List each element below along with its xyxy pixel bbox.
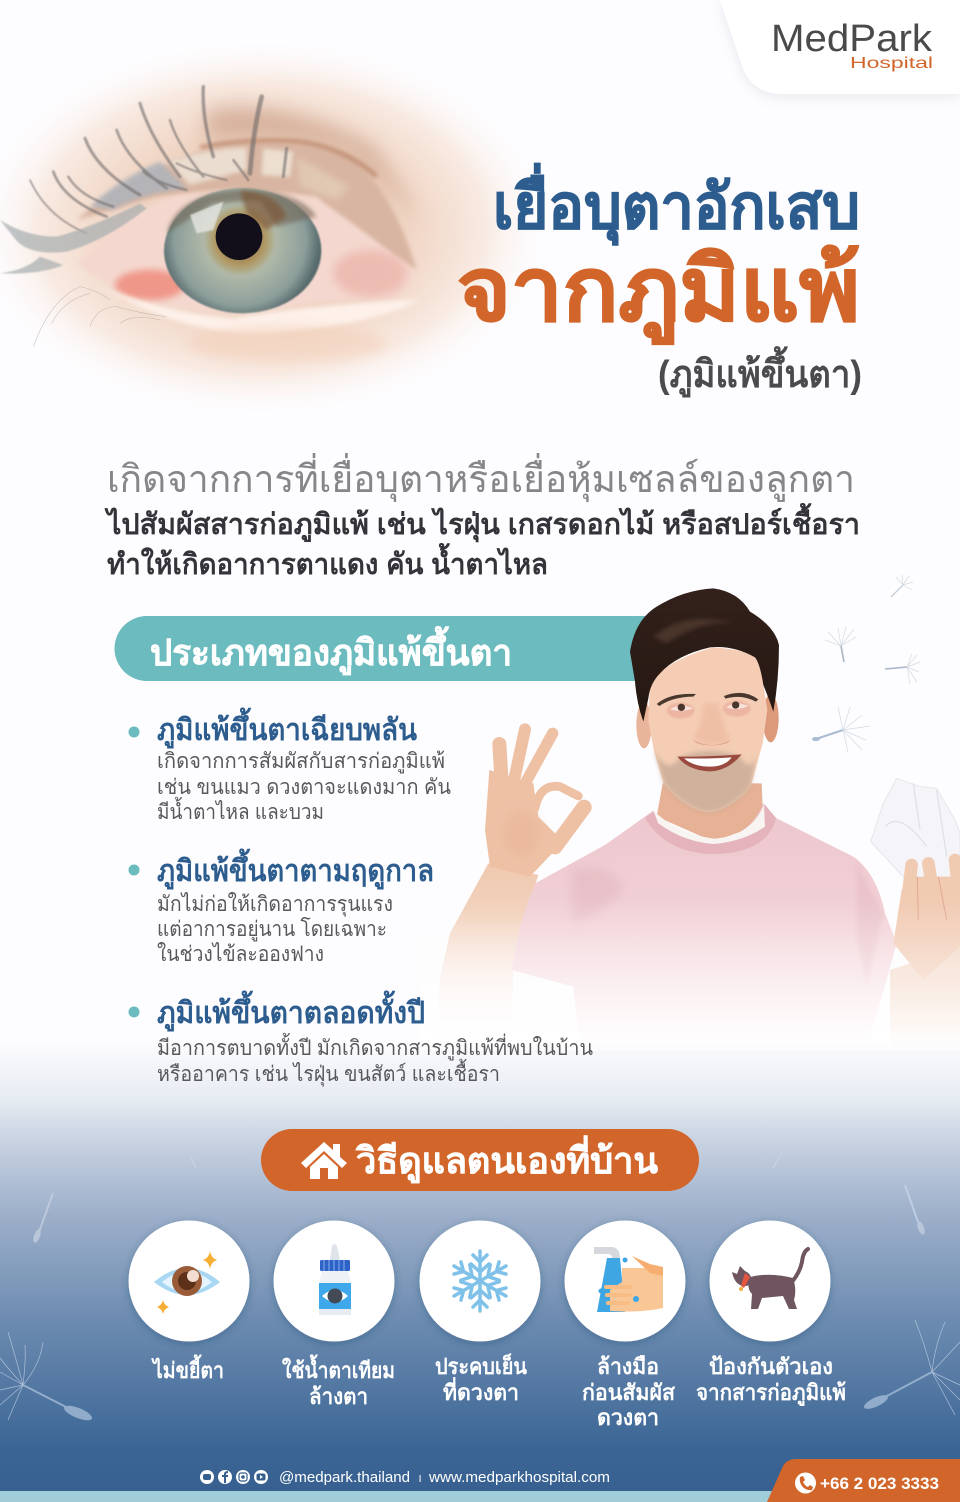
label: จากสารก่อภูมิแพ้ xyxy=(696,1380,846,1407)
neck xyxy=(657,783,763,842)
body: มีอาการตบาดทั้งปี มักเกิดจากสารภูมิแพ้ที่พบในบ้าน xyxy=(157,1033,593,1061)
shirt shadow xyxy=(570,867,623,923)
allergy type 3 xyxy=(128,990,593,1087)
lid highlights xyxy=(90,162,187,210)
bullet xyxy=(128,864,140,876)
icon: cat xyxy=(732,1249,808,1309)
arm right xyxy=(890,947,960,1050)
intro text: ไปสัมผัสสารก่อภูมิแพ้ เช่น ไรฝุ่น เกสรดอกไม้ หรือสปอร์เชื้อรา xyxy=(104,502,860,542)
logo subtitle: Hospital xyxy=(850,55,933,72)
smile xyxy=(677,754,742,771)
label: ประคบเย็น xyxy=(435,1352,527,1379)
title line 3: (ภูมิแพ้ขึ้นตา) xyxy=(658,346,862,398)
hand right xyxy=(893,860,960,980)
footer social icons xyxy=(200,1470,268,1484)
eyebrows xyxy=(657,694,696,706)
body: แต่อาการอยู่นาน โดยเฉพาะ xyxy=(157,917,387,942)
nose xyxy=(693,703,730,745)
photo: smiling man with tissue xyxy=(435,588,960,1050)
bullet xyxy=(128,1006,140,1018)
beard xyxy=(654,747,757,813)
iris xyxy=(164,188,321,313)
brow shadow xyxy=(207,107,420,220)
label: ที่ดวงตา xyxy=(443,1376,519,1405)
label: ก่อนสัมผัส xyxy=(582,1380,676,1405)
tissue xyxy=(871,778,960,887)
section header: allergy types xyxy=(114,616,660,681)
allergy type 1 xyxy=(128,707,451,824)
shirt xyxy=(512,803,897,1050)
lower lid xyxy=(100,287,420,334)
dandelion seeds lower background xyxy=(0,1155,960,1423)
tip 5: avoid allergens xyxy=(696,1220,846,1407)
body: มักไม่ก่อให้เกิดอาการรุนแรง xyxy=(157,892,393,917)
label: ล้างมือ xyxy=(597,1354,659,1379)
logo wordmark: MedPark xyxy=(771,18,933,60)
label: ป้องกันตัวเอง xyxy=(709,1354,833,1379)
label: ใช้น้ำตาเทียม xyxy=(282,1354,395,1383)
title line 1: เยื่อบุตาอักเสบ xyxy=(493,163,860,245)
label: ดวงตา xyxy=(597,1405,659,1430)
bullet xyxy=(128,726,140,738)
icon: eye drop bottle xyxy=(319,1244,351,1315)
footer bottom strip xyxy=(0,1491,960,1502)
heading: ภูมิแพ้ขึ้นตาเฉียบพลัน xyxy=(157,707,417,749)
phone number: +66 2 023 3333 xyxy=(820,1475,939,1493)
title line 2: จากภูมิแพ้ xyxy=(457,240,860,345)
logo tab xyxy=(720,0,960,94)
label xyxy=(435,1352,527,1405)
body xyxy=(157,750,451,824)
icon: snowflake xyxy=(450,1251,510,1311)
heading: ภูมิแพ้ขึ้นตาตามฤดูกาล xyxy=(157,848,434,890)
arm left xyxy=(435,863,538,1050)
intro text xyxy=(104,453,860,581)
sclera xyxy=(77,192,417,314)
phone tab xyxy=(767,1459,960,1502)
pupil xyxy=(216,213,262,260)
body: หรืออาคาร เช่น ไรฝุ่น ขนสัตว์ และเชื้อรา xyxy=(157,1059,500,1087)
body xyxy=(157,1033,593,1087)
eyelid skin xyxy=(77,143,417,270)
intro text: ทำให้เกิดอาการตาแดง คัน น้ำตาไหล xyxy=(107,542,548,581)
lower lashes xyxy=(33,287,167,347)
label xyxy=(696,1354,846,1407)
title xyxy=(457,163,862,398)
tip 2: artificial tears xyxy=(274,1220,395,1409)
icon: eye xyxy=(154,1251,220,1314)
label xyxy=(582,1354,676,1430)
crease xyxy=(200,140,377,177)
footer contact text: www.medparkhospital.com xyxy=(428,1470,610,1486)
tip 3: cold compress xyxy=(420,1220,540,1405)
lash bands xyxy=(30,87,287,233)
heading text: วิธีดูแลตนเองที่บ้าน xyxy=(355,1135,658,1184)
hand ok sign xyxy=(485,729,584,877)
hair xyxy=(630,588,779,722)
photo: red irritated eye xyxy=(0,38,552,418)
label: ล้างตา xyxy=(309,1384,368,1409)
shirt collar xyxy=(645,805,776,854)
body: เกิดจากการสัมผัสกับสารก่อภูมิแพ้ xyxy=(157,750,445,774)
ears xyxy=(636,702,652,748)
icon: house xyxy=(301,1142,347,1179)
body xyxy=(157,892,393,966)
body: มีน้ำตาไหล และบวม xyxy=(157,797,324,824)
fade of man into background xyxy=(420,900,960,1050)
tip 4: wash hands xyxy=(564,1220,686,1430)
body: เช่น ขนแมว ดวงตาจะแดงมาก คัน xyxy=(157,776,451,799)
label xyxy=(282,1354,395,1409)
allergy type 2 xyxy=(128,848,434,966)
dandelion seeds top right xyxy=(812,575,920,752)
footer contact text xyxy=(279,1470,610,1486)
eyes xyxy=(667,703,695,719)
icon: phone xyxy=(795,1472,816,1494)
intro text: เกิดจากการที่เยื่อบุตาหรือเยื่อหุ้มเซลล์ของลูกตา xyxy=(107,453,855,502)
face xyxy=(648,647,767,813)
tip 1: do not rub eyes xyxy=(128,1220,250,1383)
section header: allergy types: ประเภทของภูมิแพ้ขึ้นตา xyxy=(150,626,512,676)
body: ในช่วงไข้ละอองฟาง xyxy=(157,942,324,966)
label: ไม่ขยี้ตา xyxy=(151,1354,224,1383)
icon: washing hands xyxy=(594,1247,663,1312)
blue gradient lower background xyxy=(0,1040,960,1502)
section header: home care xyxy=(261,1129,699,1191)
heading: ภูมิแพ้ขึ้นตาตลอดทั้งปี xyxy=(157,990,425,1032)
footer contact text: @medpark.thailand xyxy=(279,1470,410,1486)
